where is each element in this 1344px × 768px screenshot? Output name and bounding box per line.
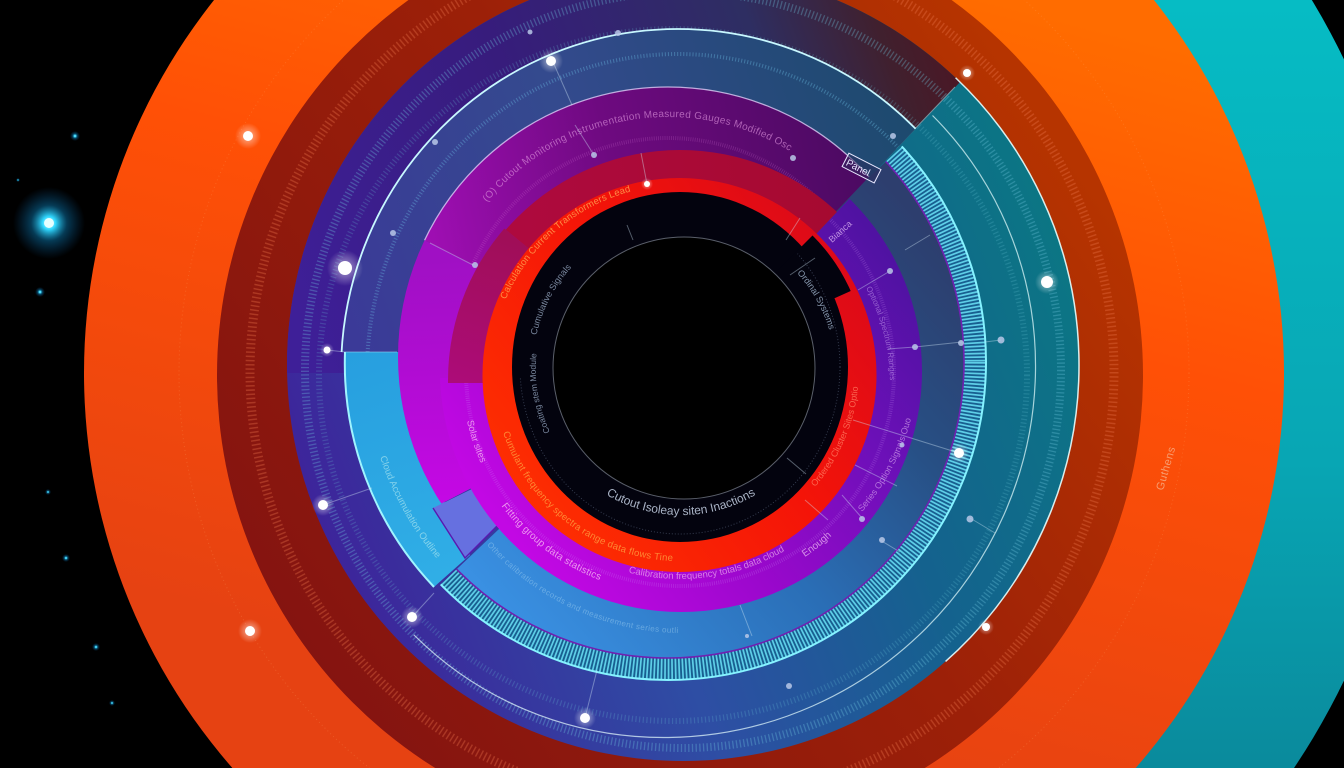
text: center upper left: Cumulative Signals <box>531 265 571 334</box>
label: bottom purple text outer: Fitting group data statistics <box>502 502 601 580</box>
text: purple upper right label: Bianca <box>827 219 854 244</box>
sector: lower right blue band <box>440 147 964 658</box>
sector: periwinkle block <box>433 487 500 558</box>
label: center bottom text: Cutout Isoleay siten Inactions <box>608 489 755 518</box>
text: right purple lower: Series Option Signals Ouo <box>858 418 910 511</box>
label: light blue sector text: Cloud Accumulation Outline <box>380 456 440 558</box>
text: right purple upper: Optional Spectrum Ranges <box>867 286 894 380</box>
sector: left magenta <box>398 240 478 504</box>
ring: outer teal <box>1136 0 1344 768</box>
label: orange ring text: Guthens <box>1154 445 1178 492</box>
text: red bottom: Cumulant frequency spectra range data flows Tine <box>504 432 672 561</box>
text: red right: Ordered Cluster Sites Option <box>812 386 858 486</box>
ring: dark red <box>217 0 1143 768</box>
small node dots <box>390 30 1004 689</box>
sector: light blue left <box>344 352 470 588</box>
ring: indigo to teal band <box>287 0 1080 761</box>
text: bottom purple inner: Calibration frequency totals data cloud <box>630 545 784 581</box>
ring: red <box>482 178 876 572</box>
sector: bottom and right purple <box>440 198 922 612</box>
text: center right: Ordinal Systems <box>798 270 834 330</box>
text: lower blue band: Other calibration records and measurement series outlined <box>488 542 678 633</box>
label: top purple text: (O) Cutout Monitoring Instrumentation Measured Gauges Modified Osc <box>482 110 792 202</box>
text: center lower left: Coating stem Module <box>530 354 549 434</box>
sector: left crimson <box>448 228 528 383</box>
text: magenta left short: Solar sites <box>468 420 485 462</box>
text: enough label: Enough <box>802 532 832 556</box>
sector: top crimson <box>506 150 837 248</box>
sector: top purple <box>424 86 870 267</box>
highlight label box: Panel <box>844 158 872 179</box>
tick band <box>440 146 987 681</box>
sector: steel blue top band <box>340 28 916 352</box>
glowing nodes <box>235 49 1059 729</box>
highlight label box <box>842 153 881 183</box>
background stars <box>13 131 115 706</box>
label: red top text: Calculation Current Transformers Lead <box>500 185 630 298</box>
center black disc <box>512 192 851 542</box>
connector lines <box>323 62 1001 718</box>
